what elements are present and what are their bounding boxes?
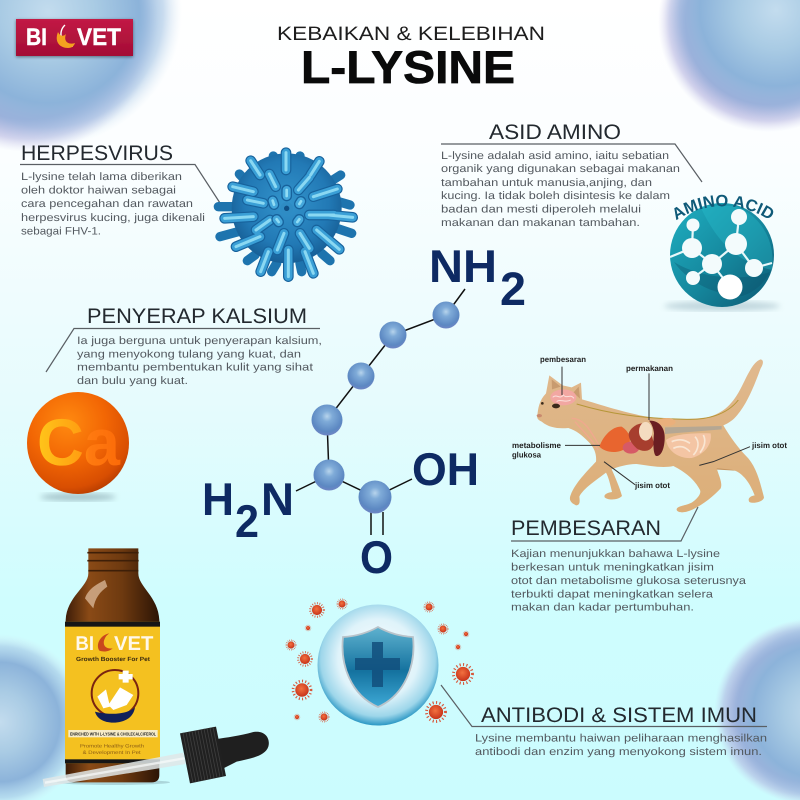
icon: amino acid ball: AMINO ACID bbox=[674, 194, 774, 220]
icon: calcium ball: Ca bbox=[37, 405, 121, 479]
bottle neck bbox=[87, 553, 139, 571]
text: asid amino: badan dan mesti diperoleh melalui bbox=[441, 204, 641, 216]
label: O: O bbox=[360, 531, 393, 583]
tube highlight bbox=[45, 758, 184, 783]
text: herpesvirus: oleh doktor haiwan sebagai bbox=[21, 184, 176, 196]
logo: BI bbox=[26, 24, 47, 51]
label: H2N: 2 bbox=[235, 495, 259, 547]
illustration: cat anatomy bbox=[512, 355, 787, 512]
cat labels: jisim otot bbox=[634, 481, 670, 490]
text: herpesvirus: cara pencegahan dan rawatan bbox=[21, 198, 193, 210]
decorative blob: top right bbox=[658, 0, 800, 132]
text: pembesaran: terbukti dapat meningkatkan selera bbox=[511, 588, 713, 600]
text: asid amino: L-lysine adalah asid amino, iaitu sebatian bbox=[441, 150, 669, 162]
cat labels: permakanan bbox=[626, 364, 673, 373]
heading: antibodi: ANTIBODI & SISTEM IMUN bbox=[481, 704, 757, 727]
label: OH: OH bbox=[412, 443, 479, 495]
dropper tube bbox=[43, 753, 186, 787]
text: kalsium: Ia juga berguna untuk penyerapan kalsium, bbox=[77, 335, 322, 347]
bottle glass bbox=[66, 548, 159, 782]
cap ribs bbox=[183, 727, 223, 783]
text: asid amino bbox=[441, 150, 680, 229]
label: H2N bbox=[202, 473, 294, 547]
germs bbox=[286, 599, 472, 722]
text: kalsium bbox=[77, 335, 322, 387]
callout line: herpesvirus bbox=[20, 164, 220, 203]
text: pembesaran: Kajian menunjukkan bahawa L-lysine bbox=[511, 548, 720, 560]
heading: penyerap kalsium: PENYERAP KALSIUM bbox=[87, 305, 307, 328]
label: H2N: N bbox=[261, 473, 294, 525]
text: antibodi: Lysine membantu haiwan peliharaan menghasilkan bbox=[475, 732, 767, 744]
label: H2N: H bbox=[202, 473, 234, 525]
text: asid amino: tambahan untuk manusia,anjing, dan bbox=[441, 177, 652, 189]
bonds bbox=[296, 289, 465, 535]
text: kalsium: membantu pembentukan kulit yang sihat bbox=[77, 362, 313, 374]
icon: calcium ball bbox=[27, 392, 129, 501]
panel: antibodi bbox=[475, 704, 767, 758]
title: KEBAIKAN & KELEBIHAN bbox=[277, 23, 545, 45]
title bbox=[277, 23, 545, 93]
dropper cap bbox=[180, 727, 226, 783]
callout line: kalsium bbox=[46, 328, 320, 372]
callout line: pembesaran bbox=[511, 507, 698, 541]
text: pembesaran: otot dan metabolisme glukosa seterusnya bbox=[511, 575, 746, 587]
callout line: asid amino bbox=[441, 144, 702, 182]
cat labels: glukosa bbox=[512, 450, 542, 460]
cat labels: jisim otot bbox=[751, 441, 787, 450]
text: asid amino: makanan dan makanan tambahan. bbox=[441, 217, 640, 229]
chart: lysine molecule bbox=[202, 240, 526, 583]
panel: asid amino bbox=[441, 121, 702, 229]
label: NH2: NH bbox=[429, 240, 497, 292]
cat labels bbox=[512, 355, 787, 490]
text: herpesvirus: L-lysine telah lama diberikan bbox=[21, 171, 182, 183]
text: pembesaran: berkesan untuk meningkatkan jisim bbox=[511, 562, 714, 574]
panel: herpesvirus bbox=[20, 142, 220, 238]
label bbox=[65, 622, 160, 763]
text: antibodi: antibodi dan enzim yang menyokong sistem imun. bbox=[475, 746, 762, 758]
product: bottle with dropper: BI bbox=[75, 632, 94, 654]
icon: amino acid ball bbox=[664, 194, 780, 312]
panel: penyerap kalsium bbox=[46, 305, 322, 387]
dropper bulb bbox=[215, 732, 269, 768]
icon: immune shield bubble bbox=[286, 599, 472, 726]
heading: pembesaran: PEMBESARAN bbox=[511, 517, 661, 540]
logo bbox=[16, 19, 133, 56]
panel: pembesaran bbox=[511, 507, 746, 614]
glass highlight bbox=[85, 580, 107, 608]
text: herpesvirus: herpesvirus kucing, juga dikenali bbox=[21, 212, 205, 224]
logo: VET bbox=[77, 24, 121, 51]
product: bottle with dropper: ENRICHED WITH L-LYSINE & CHOLECALCIFEROL bbox=[70, 731, 156, 736]
text: asid amino: organik yang digunakan sebagai makanan bbox=[441, 163, 680, 175]
text: herpesvirus bbox=[21, 171, 205, 238]
callout line: antibodi bbox=[441, 685, 767, 726]
decorative blob: bottom left bbox=[0, 634, 88, 800]
cat labels: pembesaran bbox=[540, 355, 586, 364]
decorative blob: top left bbox=[0, 0, 182, 152]
title: L-LYSINE bbox=[301, 41, 515, 93]
label: NH2 bbox=[429, 240, 526, 315]
heading: asid amino: ASID AMINO bbox=[489, 121, 621, 144]
text: pembesaran: makan dan kadar pertumbuhan. bbox=[511, 602, 694, 614]
heading: herpesvirus: HERPESVIRUS bbox=[21, 142, 173, 165]
product: bottle with dropper bbox=[43, 548, 269, 787]
text: herpesvirus: sebagai FHV-1. bbox=[21, 226, 101, 238]
text: kalsium: yang menyokong tulang yang kuat, dan bbox=[77, 348, 301, 360]
product: bottle with dropper: VET bbox=[114, 632, 153, 654]
text: kalsium: dan bulu yang kuat. bbox=[77, 375, 188, 387]
text: asid amino: kucing. Ia tidak boleh disintesis ke dalam bbox=[441, 190, 670, 202]
product: bottle with dropper: Promote Healthy Growth bbox=[80, 743, 144, 749]
product: bottle with dropper: Growth Booster For Pet bbox=[76, 656, 150, 662]
decorative blob: bottom right bbox=[714, 616, 800, 800]
product: bottle with dropper: & Development In Pet bbox=[83, 750, 141, 755]
atoms bbox=[312, 302, 460, 514]
label: NH2: 2 bbox=[500, 262, 526, 315]
cat labels: metabolisme bbox=[512, 441, 562, 450]
text: pembesaran bbox=[511, 548, 746, 614]
icon: virus bbox=[218, 153, 353, 277]
text: antibodi bbox=[475, 732, 767, 758]
